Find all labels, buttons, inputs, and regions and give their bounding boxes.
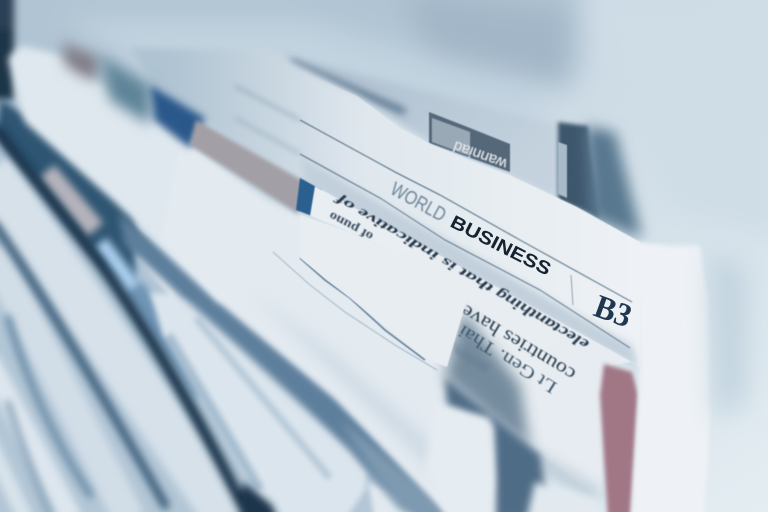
dark gap behind the main page xyxy=(558,122,642,238)
upside-down line two: countries have xyxy=(457,300,580,385)
pink spine xyxy=(600,364,638,512)
dark gap under inner page xyxy=(445,378,550,512)
back page photo box: wanniad xyxy=(451,137,510,173)
main dark spine fold xyxy=(0,128,280,512)
front folded sheet corner xyxy=(300,215,472,367)
white fold strip on right xyxy=(632,242,710,512)
label: world: WORLD xyxy=(387,179,449,226)
dark blue wedge at upper left xyxy=(0,98,135,295)
blurred masthead stripe xyxy=(290,62,405,112)
shadow at the left of inner page xyxy=(445,310,530,450)
upside-down line four: ntries, xyxy=(446,339,492,377)
blurred left of the page xyxy=(130,48,420,215)
label: B3: B3 xyxy=(589,289,636,335)
upside-down line one, near part: electanthing xyxy=(492,284,592,352)
tan and blue blurred stripes xyxy=(46,172,205,392)
back newspaper page xyxy=(280,55,558,196)
upside-down line one, far part: that is indicative of xyxy=(330,190,496,295)
lower-left paper base xyxy=(0,120,480,512)
back page photo box xyxy=(429,112,510,173)
header rule lines xyxy=(300,120,632,348)
blurred top of the stack xyxy=(0,0,768,240)
blurred white sheet bottom xyxy=(425,406,494,512)
label: business: BUSINESS xyxy=(447,211,555,280)
pale bands beside the blue stripe xyxy=(118,215,420,512)
inner page with upside-down text xyxy=(310,186,632,505)
brown and blue spine behind the page xyxy=(62,42,322,216)
blurred rule extension xyxy=(235,86,300,154)
upside-down line three: Lt Gen. Thai xyxy=(455,321,560,398)
blurred dark folds on far left xyxy=(0,225,165,512)
shadow at the bottom of inner page xyxy=(490,430,600,505)
front stack of folded sheets xyxy=(8,46,494,512)
upside-down fragment: of puno xyxy=(326,209,375,245)
blurred pale paper bands xyxy=(0,170,230,512)
soft shade on the stack xyxy=(255,295,450,490)
shadow on the page bottom xyxy=(300,156,640,368)
dark left corner xyxy=(0,0,14,100)
blurred white sheet bottom right xyxy=(525,482,600,512)
right shadow strip xyxy=(712,250,745,420)
main page: world business header xyxy=(130,48,640,368)
sheet edge lines xyxy=(273,252,437,370)
mid-blue shadow band under the front stack xyxy=(118,212,448,512)
